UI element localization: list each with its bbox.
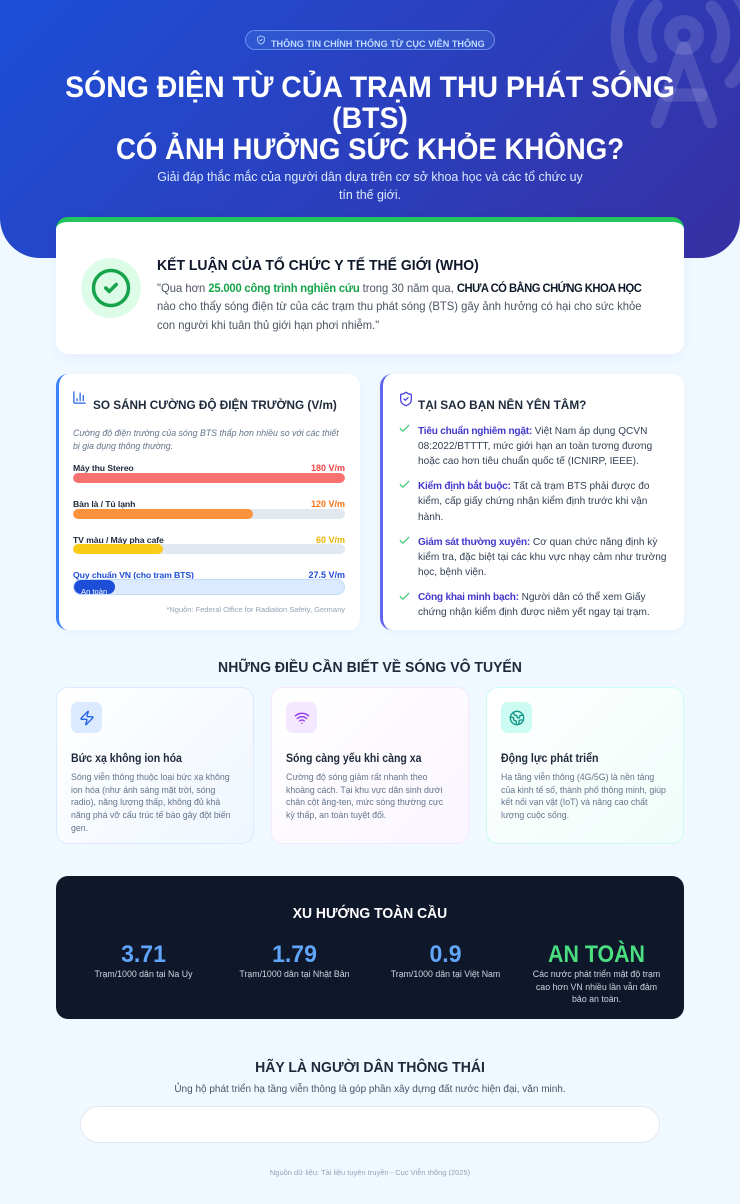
stat: Japan: Trạm/1000 dân tại Nhật Bản — [239, 969, 350, 979]
stat: safe: Các nước phát triển mật độ trạm — [533, 969, 660, 979]
card text: chân cột ăng-ten, mức sóng thường cực — [286, 797, 443, 807]
card text — [71, 772, 230, 833]
safety item 1: hoặc cao hơn tiêu chuẩn quốc tế (ICNIRP, IEEE). — [418, 456, 639, 467]
card text — [286, 772, 443, 820]
WHO quote: nào cho thấy sóng điện từ của các trạm thu phát sóng (BTS) gây ảnh hưởng có hại cho sức khỏe — [157, 299, 641, 313]
stat: safe: AN TOÀN — [548, 941, 645, 968]
safety heading: TẠI SAO BẠN NÊN YÊN TÂM? — [418, 398, 586, 412]
safety item 1: Tiêu chuẩn nghiêm ngặt: Việt Nam áp dụng QCVN — [418, 426, 647, 436]
card title: Động lực phát triển — [501, 751, 598, 765]
icon: shield check — [400, 392, 412, 406]
subtitle — [157, 170, 583, 202]
card text: kỳ thấp, an toàn tuyệt đối. — [286, 810, 386, 820]
chart note — [73, 428, 339, 451]
title: (BTS) — [332, 102, 408, 135]
icon: wifi — [286, 702, 317, 733]
safety item 3: kiểm tra, đặc biệt tại các khu vực nhạy cảm như trường — [418, 552, 666, 563]
stat: Japan — [239, 941, 350, 979]
safety item 2 — [418, 480, 650, 523]
WHO quote — [157, 280, 642, 332]
safety item 3: học, bệnh viện. — [418, 567, 486, 578]
card: non-ionizing — [56, 687, 254, 844]
icon: shield — [257, 35, 265, 45]
safety item 2: hành. — [418, 512, 443, 523]
safety item 2: kiểm, cấp giấy chứng nhận kiểm định trước khi vận — [418, 496, 647, 507]
icon: globe — [501, 702, 532, 733]
WHO heading: KẾT LUẬN CỦA TỔ CHỨC Y TẾ THẾ GIỚI (WHO) — [157, 257, 479, 274]
WHO quote: con người khi tuân thủ giới hạn phơi nhiễm." — [157, 318, 379, 332]
empty pill — [80, 1106, 660, 1143]
header banner — [0, 0, 740, 258]
card text: Hạ tầng viễn thông (4G/5G) là nền tảng — [501, 772, 654, 782]
bar chart: 120 V/m — [311, 499, 345, 509]
stat: safe: bảo an toàn. — [572, 994, 621, 1004]
section heading: radio waves: NHỮNG ĐIỀU CẦN BIẾT VỀ SÓNG VÔ TUYẾN — [218, 659, 522, 676]
card text: radio), năng lượng thấp, không đủ khả — [71, 797, 220, 807]
card text: khoảng cách. Tại khu vực dân sinh dưới — [286, 785, 442, 795]
safety item 1: 08:2022/BTTTT, mức giới hạn an toàn tương đương — [418, 441, 652, 452]
chart heading: SO SÁNH CƯỜNG ĐỘ ĐIỆN TRƯỜNG (V/m) — [93, 398, 337, 412]
stat: Norway: Trạm/1000 dân tại Na Uy — [95, 969, 192, 979]
card title: Bức xạ không ion hóa — [71, 751, 182, 765]
chart note: Cường độ điện trường của sóng BTS thấp hơn nhiều so với các thiết — [73, 428, 339, 438]
card: development — [486, 687, 684, 844]
subtitle: Giải đáp thắc mắc của người dân dựa trên cơ sở khoa học và các tổ chức uy — [157, 170, 583, 184]
footer source: Nguồn dữ liệu: Tài liệu tuyên truyền - Cục Viễn thông (2025) — [270, 1168, 470, 1177]
stat: safe: cao hơn VN nhiều lần vẫn đảm — [536, 982, 657, 992]
card title: Sóng càng yếu khi càng xa — [286, 751, 422, 765]
icon: bar chart — [73, 391, 86, 404]
call to action heading: HÃY LÀ NGƯỜI DÂN THÔNG THÁI — [255, 1059, 485, 1076]
stat: Vietnam — [390, 941, 500, 979]
badge text: THÔNG TIN CHÍNH THỐNG TỪ CỤC VIỄN THÔNG — [271, 39, 485, 49]
stat: Norway: 3.71 — [121, 941, 166, 968]
safety item 2: Kiểm định bắt buộc: Tất cả trạm BTS phải được đo — [418, 481, 650, 492]
icon: check circle — [81, 258, 141, 318]
card text: năng phá vỡ cấu trúc tế bào gây đột biến — [71, 810, 230, 820]
stat: Vietnam: 0.9 — [429, 941, 462, 968]
title — [65, 70, 675, 166]
stat: Vietnam: Trạm/1000 dân tại Việt Nam — [391, 969, 500, 979]
panel: global trends — [56, 876, 684, 1019]
safety item 1 — [418, 426, 652, 467]
bar chart: TV màu / Máy pha cafe — [73, 534, 164, 544]
card text: Cường độ sóng giảm rất nhanh theo — [286, 772, 427, 782]
call to action text: Ủng hộ phát triển hạ tầng viễn thông là góp phần xây dựng đất nước hiện đại, văn minh. — [174, 1084, 566, 1094]
icon: check 1 — [400, 424, 410, 432]
safety item 4 — [418, 592, 650, 618]
bar chart: Máy thu Stereo — [73, 463, 134, 473]
trends heading: XU HƯỚNG TOÀN CẦU — [293, 904, 447, 922]
title: SÓNG ĐIỆN TỪ CỦA TRẠM THU PHÁT SÓNG — [65, 71, 675, 104]
card text: Sóng viễn thông thuộc loại bức xạ không — [71, 772, 230, 782]
card text: lượng cuộc sống. — [501, 810, 569, 820]
bar chart: 27.5 V/m — [308, 570, 345, 580]
chart note: bị gia dụng thông thường. — [73, 441, 173, 451]
panel: field strength comparison — [56, 374, 360, 630]
stat: Japan: 1.79 — [272, 941, 317, 968]
title: CÓ ẢNH HƯỞNG SỨC KHỎE KHÔNG? — [116, 133, 624, 166]
card text: gen. — [71, 823, 88, 833]
stat: safe — [533, 940, 660, 1004]
stat: Norway — [94, 941, 192, 979]
bar chart — [73, 463, 345, 614]
card text: kết nối vạn vật (IoT) và nâng cao chất — [501, 797, 647, 807]
icon: radio tower watermark — [610, 0, 740, 128]
icon: check 3 — [400, 536, 410, 544]
panel: why feel safe — [380, 374, 684, 630]
card text — [501, 772, 666, 820]
card text: của kinh tế số, thành phố thông minh, giúp — [501, 785, 666, 795]
badge — [245, 30, 495, 50]
safety item 4: chứng nhận kiểm định được niêm yết ngay tại trạm. — [418, 607, 650, 618]
bar chart: Bàn là / Tủ lạnh — [73, 499, 135, 509]
card text: ion hóa (như ánh sáng mặt trời, sóng — [71, 785, 215, 795]
card: distance — [271, 687, 469, 844]
bar chart: Quy chuẩn VN (cho trạm BTS) — [73, 570, 194, 580]
bar chart: 60 V/m — [316, 534, 345, 544]
safety item 3: Giám sát thường xuyên: Cơ quan chức năng định kỳ — [418, 536, 657, 548]
WHO quote: "Qua hơn 25.000 công trình nghiên cứu trong 30 năm qua, CHƯA CÓ BẰNG CHỨNG KHOA HỌC — [157, 280, 641, 294]
icon: check 2 — [400, 480, 410, 488]
safety item 3 — [418, 536, 666, 578]
bar chart: 180 V/m — [311, 463, 345, 473]
chart source: *Nguồn: Federal Office for Radiation Safety, Germany — [166, 604, 345, 614]
icon: zap — [71, 702, 102, 733]
panel: WHO conclusion — [56, 217, 684, 354]
safety item 4: Công khai minh bạch: Người dân có thể xem Giấy — [418, 592, 646, 603]
subtitle: tín thế giới. — [339, 188, 401, 202]
icon: check 4 — [400, 592, 410, 600]
